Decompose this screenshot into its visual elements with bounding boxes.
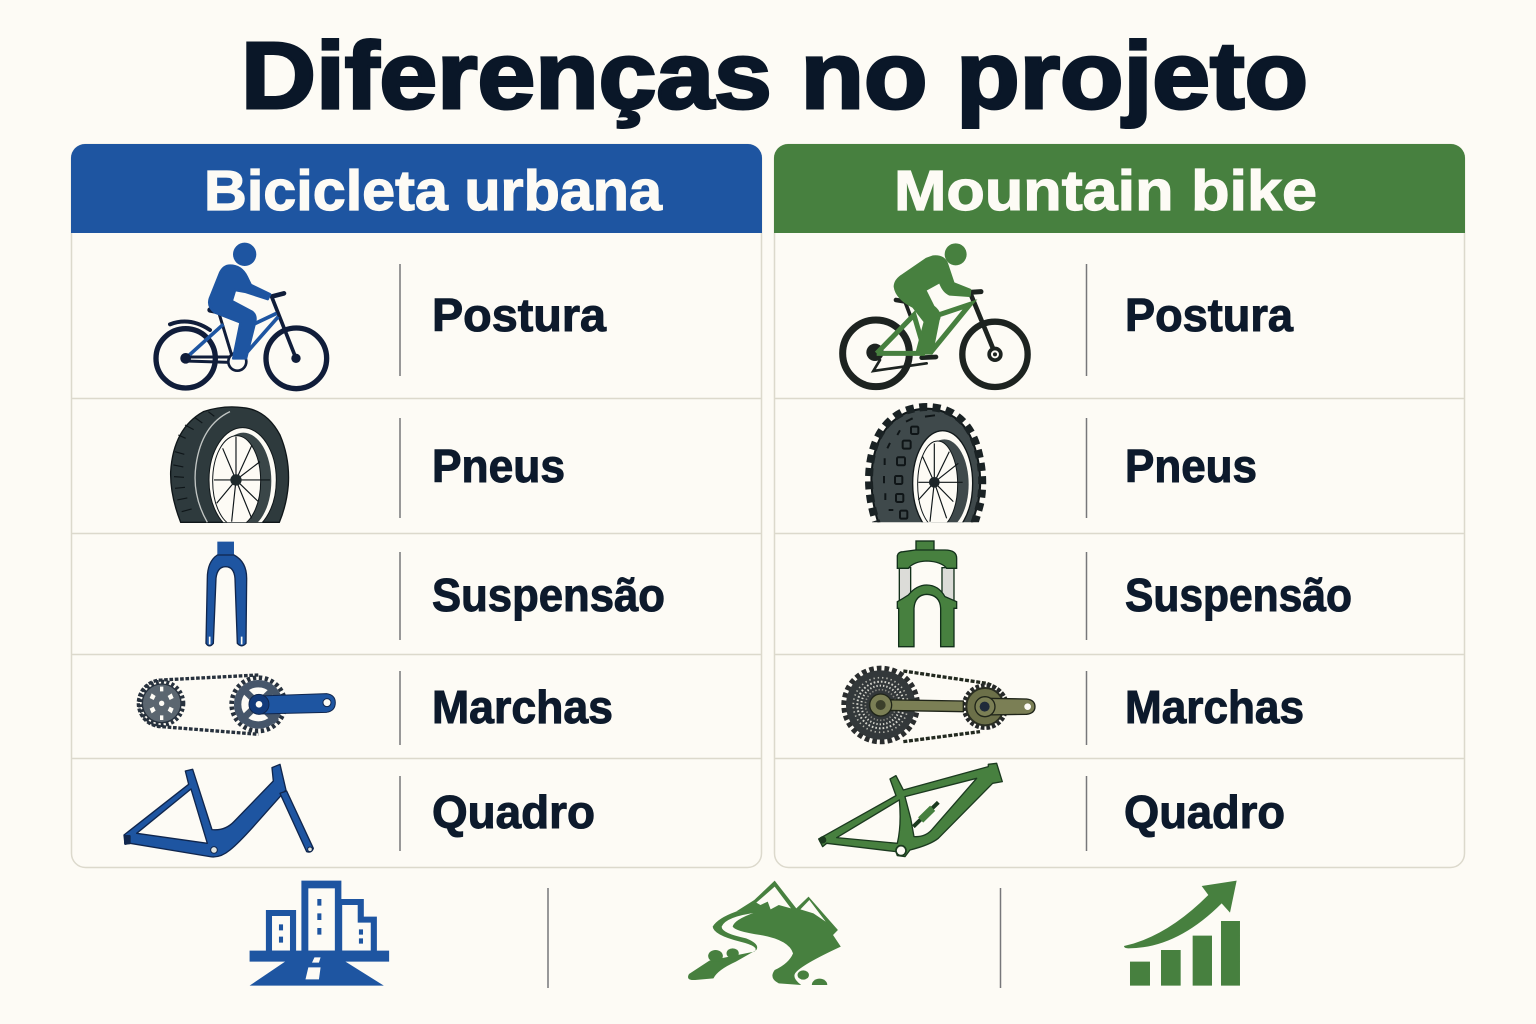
label: Marchas: Marchas [1125,681,1304,733]
icon: knobby mountain tyre [869,407,982,536]
icon: rising bar chart with arrow [1124,881,1240,986]
label: Pneus: Pneus [1125,440,1257,492]
label: Suspensão: Suspensão [1125,569,1352,621]
label: Pneus: Pneus [432,440,565,492]
icon: full suspension frame [819,763,1002,857]
label: Quadro: Quadro [1124,786,1285,838]
footer divider right [1000,888,1002,988]
panel header: urban bike [71,144,762,233]
icon: rigid fork [206,542,247,646]
icon: suspension fork [897,541,957,647]
icon: multi-speed cassette drivetrain [844,668,1035,742]
panel header: mountain bike: Mountain bike [894,159,1317,223]
footer divider left [547,888,549,988]
icon: upright urban cyclist [156,243,327,389]
panel header: urban bike: Bicicleta urbana [204,159,663,223]
label: Quadro: Quadro [432,786,595,838]
icon: smooth city tyre [171,407,289,532]
panel: mountain bike [774,144,1465,868]
icon: urban step-through frame [124,764,313,857]
label: Marchas: Marchas [432,681,613,733]
title: Diferenças no projeto [241,23,1308,129]
icon: single chainring drivetrain [138,675,335,734]
label: Postura: Postura [432,289,606,341]
label: Postura: Postura [1125,289,1293,341]
panel: urban bike [71,144,762,868]
label: Suspensão: Suspensão [432,569,665,621]
icon: leaning mountain cyclist [843,243,1028,387]
icon: city with road [250,881,389,986]
icon: mountain trail [688,881,841,985]
panel header: mountain bike [774,144,1465,233]
